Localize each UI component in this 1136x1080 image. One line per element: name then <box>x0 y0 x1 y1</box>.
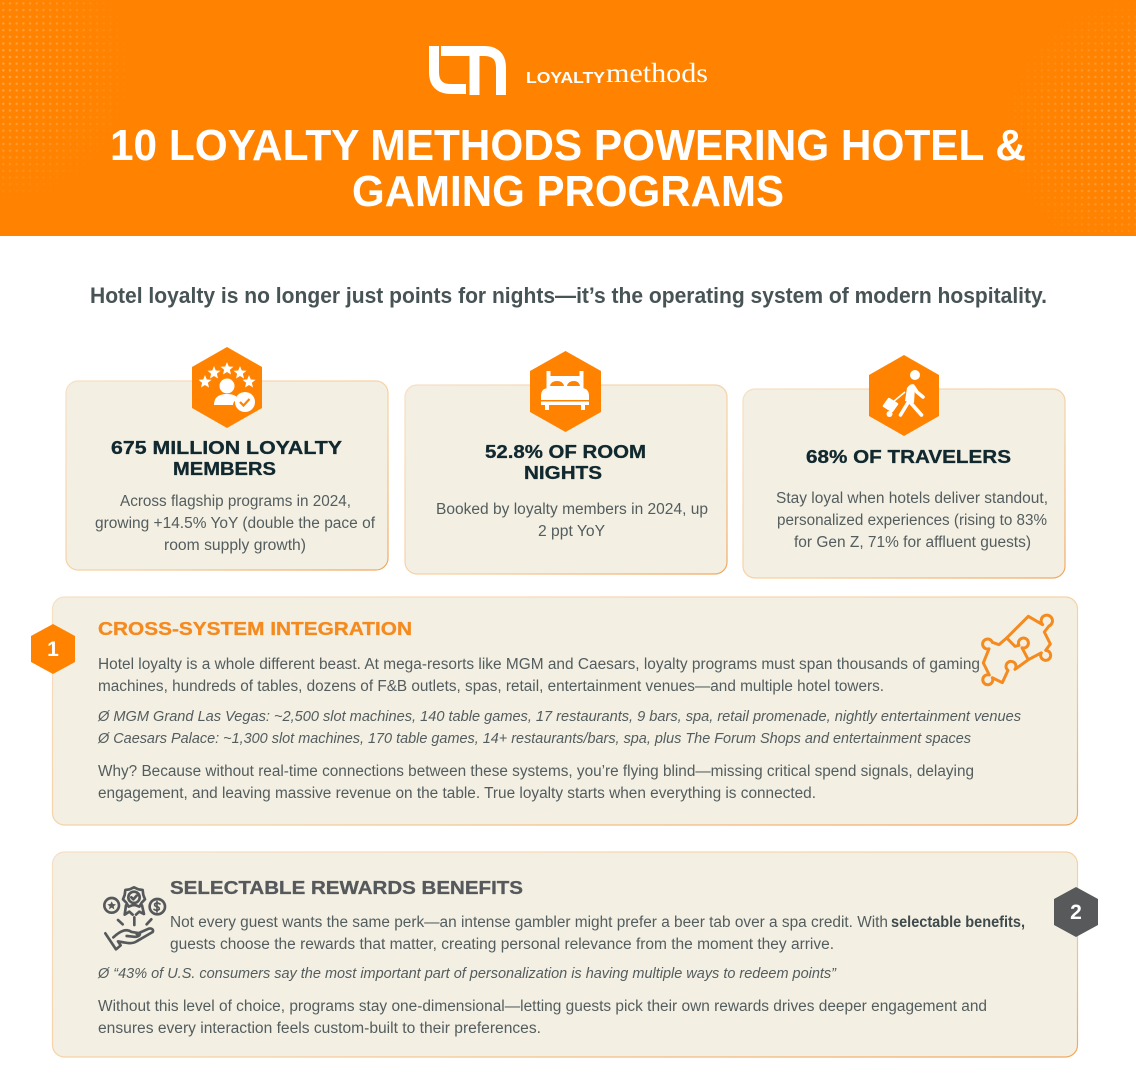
stat heading <box>111 438 342 479</box>
stat heading: NIGHTS <box>524 463 602 483</box>
panel: 68% of travelers <box>743 355 1065 578</box>
intro text: Hotel loyalty is a whole different beast. At mega-resorts like MGM and Caesars, loyalty programs must span thousands of gaming <box>98 656 980 673</box>
stat description: personalized experiences (rising to 83% <box>777 512 1047 529</box>
number badge 1 <box>31 624 75 674</box>
stat description: Booked by loyalty members in 2024, up <box>436 501 708 518</box>
stat description: for Gen Z, 71% for affluent guests) <box>794 534 1031 551</box>
method heading: CROSS-SYSTEM INTEGRATION <box>98 618 412 639</box>
stat description: 2 ppt YoY <box>538 523 605 540</box>
stat heading: 68% OF TRAVELERS <box>806 447 1011 467</box>
number badge 1: 1 <box>47 638 59 661</box>
bullet statistic: Ø “43% of U.S. consumers say the most important part of personalization is having multiple ways to redeem points” <box>97 965 837 982</box>
logo: Loyalty Methods: LOYALTY <box>526 70 606 87</box>
bullet examples: Ø MGM Grand Las Vegas: ~2,500 slot machines, 140 table games, 17 restaurants, 9 bars, spa, retail promenade, nightly entertainment venues <box>97 708 1021 725</box>
header banner <box>0 0 1136 236</box>
stat heading: MEMBERS <box>173 459 276 479</box>
intro text: Not every guest wants the same perk—an intense gambler might prefer a beer tab over a spa credit. With <box>170 914 888 931</box>
stat description: Stay loyal when hotels deliver standout, <box>776 490 1048 507</box>
stat heading <box>485 442 646 483</box>
closing text <box>98 763 974 802</box>
title: GAMING PROGRAMS <box>352 167 784 216</box>
closing text <box>98 998 987 1037</box>
intro text: guests choose the rewards that matter, creating personal relevance from the moment they arrive. <box>170 936 834 953</box>
panel: 675 million loyalty members <box>66 347 388 570</box>
icon: bed <box>530 351 601 432</box>
intro text: selectable benefits, <box>891 914 1025 931</box>
closing text: engagement, and leaving massive revenue on the table. True loyalty starts when everything is connected. <box>98 785 816 802</box>
closing text: Without this level of choice, programs stay one-dimensional—letting guests pick their own rewards drives deeper engagement and <box>98 998 987 1015</box>
bullet examples <box>97 708 1021 747</box>
bullet examples: Ø Caesars Palace: ~1,300 slot machines, 170 table games, 14+ restaurants/bars, spa, plus The Forum Shops and entertainment spaces <box>97 730 971 747</box>
method heading: SELECTABLE REWARDS BENEFITS <box>170 877 523 898</box>
intro text <box>170 914 1025 953</box>
number badge 2 <box>1054 887 1098 937</box>
stat description <box>776 490 1048 551</box>
icon: puzzle pieces <box>983 615 1052 685</box>
icon: member with stars <box>192 347 262 428</box>
logo: Loyalty Methods <box>434 46 708 95</box>
panel: method 1 cross-system integration <box>31 597 1078 825</box>
logo: Loyalty Methods: methods <box>606 58 708 88</box>
stat description: growing +14.5% YoY (double the pace of <box>95 515 376 532</box>
stat heading: 52.8% OF ROOM <box>485 442 646 462</box>
stat description <box>436 501 708 540</box>
title <box>110 121 1026 216</box>
panel: 52.8% of room nights <box>405 351 727 574</box>
stat description <box>95 493 376 554</box>
stat description: Across flagship programs in 2024, <box>120 493 351 510</box>
intro text <box>98 656 980 695</box>
closing text: Why? Because without real-time connections between these systems, you’re flying blind—missing critical spend signals, delaying <box>98 763 974 780</box>
icon: traveler with suitcase <box>869 355 939 436</box>
intro text: machines, hundreds of tables, dozens of F&B outlets, spas, retail, entertainment venues—and multiple hotel towers. <box>98 678 884 695</box>
stat heading: 675 MILLION LOYALTY <box>111 438 342 458</box>
number badge 2: 2 <box>1070 901 1082 924</box>
icon: hand with reward badges <box>104 887 165 949</box>
closing text: ensures every interaction feels custom-built to their preferences. <box>98 1020 541 1037</box>
title: 10 LOYALTY METHODS POWERING HOTEL & <box>110 121 1026 170</box>
stat description: room supply growth) <box>164 537 306 554</box>
panel: method 2 selectable rewards benefits <box>52 852 1098 1057</box>
subtitle: Hotel loyalty is no longer just points for nights—it’s the operating system of modern hospitality. <box>90 283 1047 308</box>
